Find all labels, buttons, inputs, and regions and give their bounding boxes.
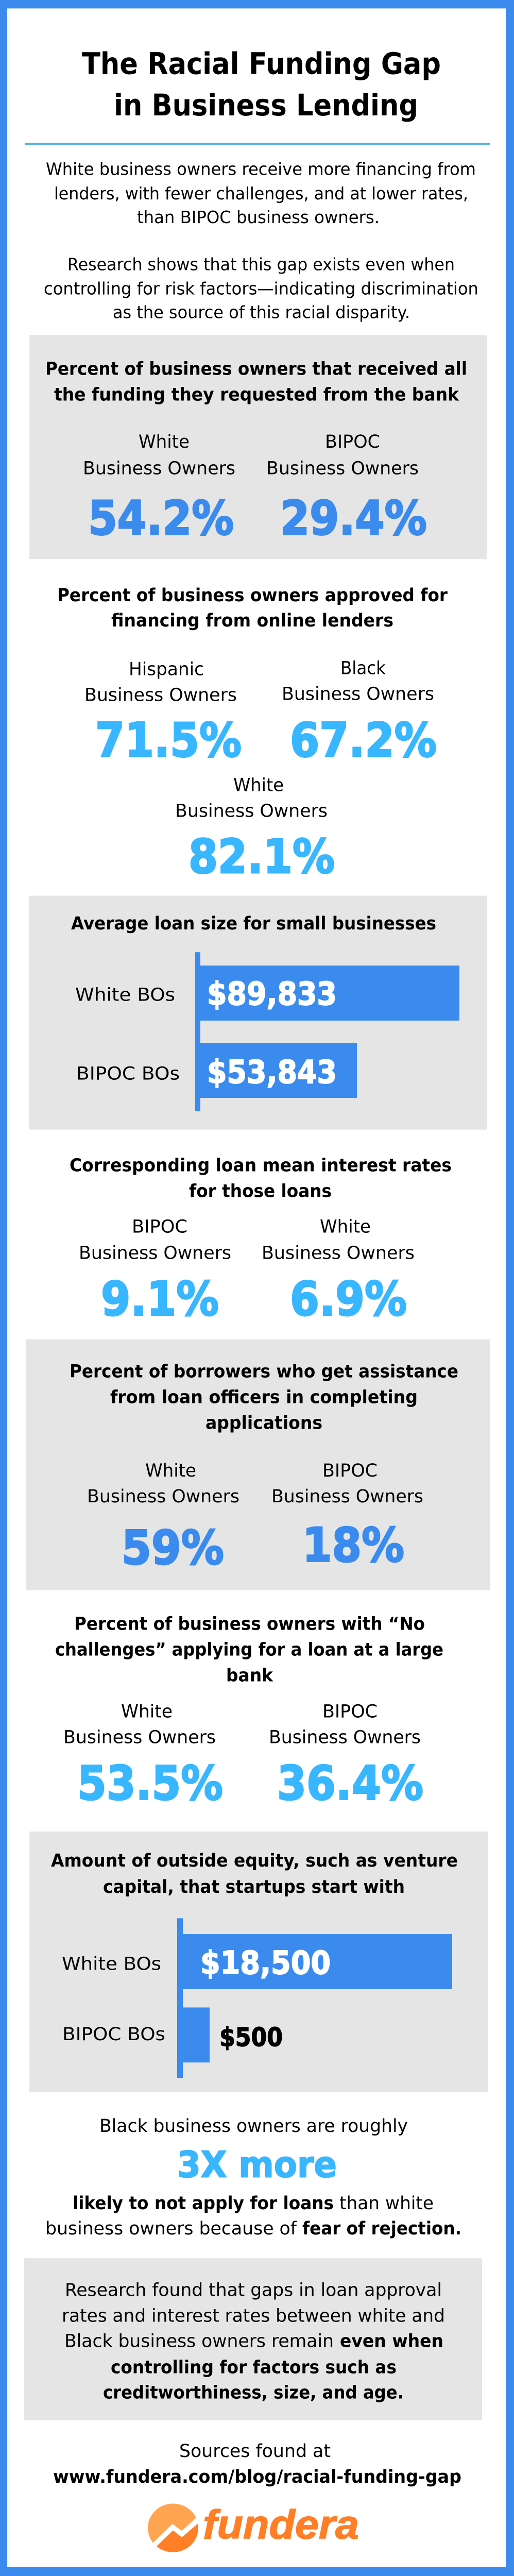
bar chart: loan size [75, 952, 459, 1111]
stat: BIPOC owners: Business Owners [79, 1243, 231, 1264]
heading: the funding they requested from the bank [54, 384, 459, 405]
section: interest rates [70, 1155, 452, 1326]
research text: controlling for factors such as [111, 2357, 397, 2378]
intro text [44, 159, 478, 323]
intro text: controlling for risk factors—indicating discrimination [44, 279, 478, 298]
stat: Hispanic owners: 71.5% [95, 713, 242, 768]
stat: white owners: White [233, 775, 284, 795]
heading [55, 1614, 443, 1686]
bar chart: outside equity: White BOs [62, 1954, 161, 1974]
heading: Amount of outside equity, such as venture [51, 1851, 458, 1871]
heading [70, 1361, 458, 1434]
stat: white owners: 53.5% [77, 1755, 223, 1810]
research text: Research found that gaps in loan approval [65, 2280, 442, 2300]
research text: creditworthiness, size, and age. [103, 2382, 404, 2403]
panel: outside equity [29, 1832, 488, 2092]
stat: BIPOC owners: BIPOC [132, 1216, 187, 1238]
stat: BIPOC owners: 29.4% [280, 490, 427, 546]
bar chart: outside equity: $500 [219, 2023, 283, 2053]
title: The Racial Funding Gap [82, 46, 441, 81]
stat: BIPOC owners [269, 1701, 423, 1810]
heading: Corresponding loan mean interest rates [70, 1155, 452, 1176]
intro text: lenders, with fewer challenges, and at lower rates, [54, 183, 468, 204]
stat: white owners [87, 1461, 239, 1575]
stat: white owners: White [320, 1216, 371, 1238]
icon: chart circle [148, 2504, 198, 2552]
heading [70, 1155, 452, 1201]
stat: BIPOC owners: BIPOC [322, 1461, 378, 1481]
stat: BIPOC owners [79, 1216, 231, 1326]
heading: Percent of business owners that received all [45, 359, 467, 379]
stat: white owners: White [145, 1461, 196, 1481]
section: no challenges [55, 1614, 443, 1810]
bar chart: outside equity [62, 1918, 452, 2078]
stat: BIPOC owners: 18% [302, 1517, 404, 1572]
callout: 3X more: business owners because of [45, 2218, 298, 2239]
callout: 3X more: likely to not apply for loans [73, 2193, 334, 2214]
stat: white owners [63, 1701, 223, 1810]
callout: 3X more: 3X more [177, 2144, 337, 2185]
intro text: Research shows that this gap exists even when [67, 255, 455, 274]
panel: research finding [24, 2258, 482, 2420]
heading: Percent of business owners approved for [57, 585, 448, 606]
research text [62, 2280, 445, 2403]
bar chart: loan size: BIPOC BOs [76, 1063, 180, 1084]
bar chart: loan size: White BOs [75, 985, 175, 1005]
stat: Black owners: 67.2% [290, 713, 437, 768]
stat: Hispanic owners: Hispanic [129, 659, 204, 680]
stat: white owners: Business Owners [175, 801, 328, 821]
section: online lender approval [57, 585, 448, 884]
intro text: than BIPOC business owners. [137, 208, 380, 227]
research text: even when [340, 2331, 443, 2351]
stat: white owners: White [139, 431, 190, 452]
heading [57, 585, 448, 631]
title: in Business Lending [114, 88, 418, 123]
stat: white owners: Business Owners [87, 1486, 239, 1507]
callout: 3X more: Black business owners are roughly [99, 2116, 408, 2137]
heading: financing from online lenders [111, 611, 393, 631]
wordmark: fundera [203, 2502, 359, 2548]
stat: white owners: 6.9% [290, 1271, 407, 1326]
stat: BIPOC owners: 36.4% [277, 1755, 423, 1810]
sources: www.fundera.com/blog/racial-funding-gap [53, 2467, 461, 2487]
research text: rates and interest rates between white and [62, 2306, 445, 2326]
stat: BIPOC owners [266, 431, 427, 546]
heading: Average loan size for small businesses [71, 913, 436, 934]
stat: white owners: Business Owners [262, 1243, 415, 1264]
heading: Percent of borrowers who get assistance [70, 1361, 458, 1382]
stat: BIPOC owners: BIPOC [325, 431, 380, 452]
bar chart: loan size: $53,843 [207, 1054, 337, 1091]
heading: applications [205, 1413, 322, 1434]
stat: Black owners: Business Owners [282, 684, 434, 704]
intro text: White business owners receive more financing from [46, 159, 476, 179]
stat: Black owners [282, 658, 437, 768]
stat: Hispanic owners [84, 659, 242, 768]
panel: full funding received [29, 335, 487, 559]
title [82, 46, 441, 123]
research text: Black business owners remain [64, 2331, 334, 2351]
intro text: as the source of this racial disparity. [113, 302, 410, 323]
stat: white owners [83, 431, 235, 546]
stat: BIPOC owners: 9.1% [101, 1271, 219, 1326]
heading: Percent of business owners with “No [74, 1614, 425, 1634]
heading: capital, that startups start with [103, 1877, 405, 1897]
stat: BIPOC owners: Business Owners [266, 458, 419, 479]
callout: 3X more [45, 2116, 461, 2239]
stat: BIPOC owners [271, 1461, 423, 1572]
heading: from loan officers in completing [110, 1387, 418, 1408]
stat: BIPOC owners: Business Owners [269, 1727, 421, 1748]
bar chart: outside equity: $18,500 [200, 1944, 331, 1981]
stat: Black owners: Black [340, 658, 386, 679]
heading: challenges” applying for a loan at a large [55, 1639, 443, 1660]
heading: for those loans [189, 1181, 332, 1201]
stat: white owners: Business Owners [63, 1727, 216, 1748]
heading [51, 1851, 458, 1897]
heading [45, 359, 467, 405]
stat: white owners: 82.1% [189, 829, 335, 884]
bar chart: loan size: $89,833 [207, 975, 337, 1012]
panel: average loan size [29, 896, 487, 1130]
stat: white owners: White [121, 1701, 173, 1722]
stat: BIPOC owners: BIPOC [322, 1701, 378, 1722]
panel: loan officer assistance [26, 1340, 490, 1590]
stat: white owners: 59% [122, 1520, 224, 1575]
callout: 3X more: than white [339, 2193, 434, 2214]
callout: 3X more: fear of rejection. [302, 2218, 461, 2239]
sources: Sources found at [179, 2441, 331, 2462]
sources [53, 2441, 461, 2487]
stat: Hispanic owners: Business Owners [84, 685, 237, 705]
bar chart: outside equity: BIPOC BOs [62, 2024, 165, 2045]
stat: BIPOC owners: Business Owners [271, 1486, 423, 1507]
stat: white owners [262, 1216, 415, 1326]
stat: white owners: Business Owners [83, 458, 235, 479]
heading: bank [226, 1665, 273, 1686]
logo: fundera [148, 2502, 359, 2552]
stat: white owners [175, 775, 335, 884]
stat: white owners: 54.2% [88, 490, 234, 546]
